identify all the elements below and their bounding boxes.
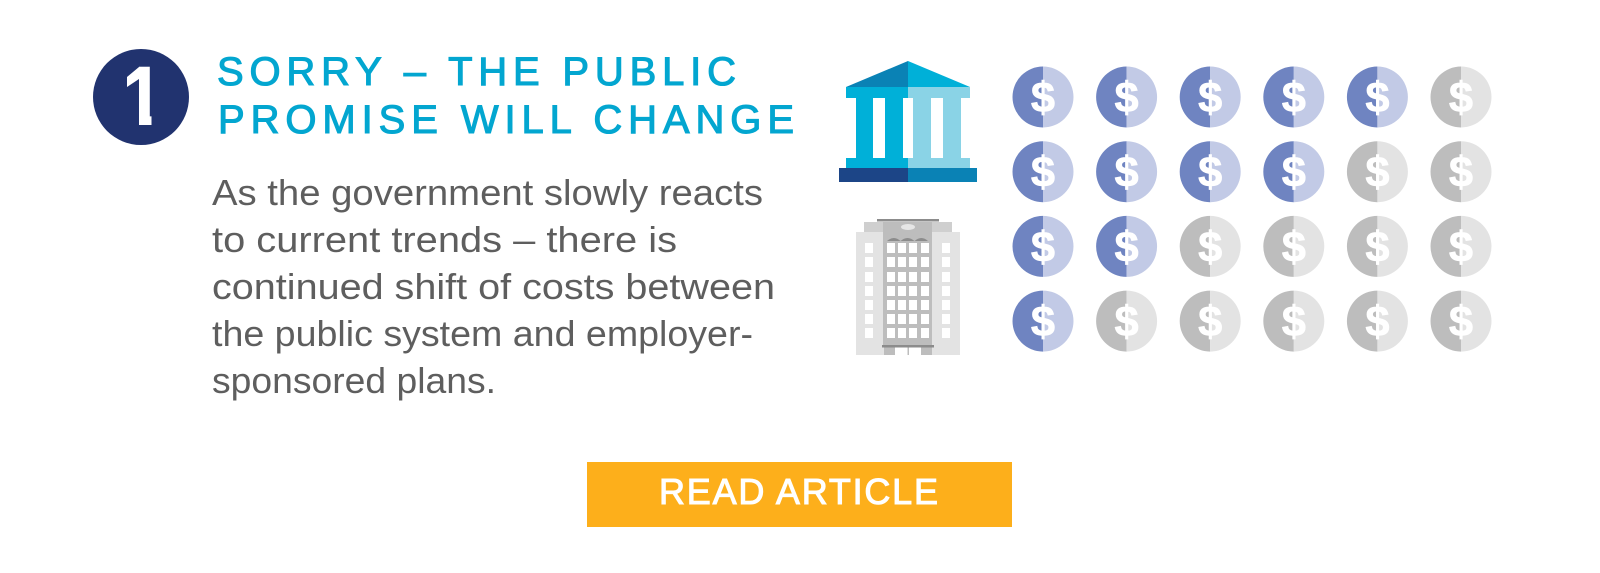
coin row 2: four blue, two grey: $ bbox=[1282, 149, 1306, 197]
coin row 3: two blue, four grey: $ bbox=[1115, 223, 1139, 271]
coin row 1: five blue, one grey: $ bbox=[1365, 74, 1389, 122]
coin row 4: one blue, five grey: $ bbox=[1198, 298, 1222, 346]
coin row 4: one blue, five grey: $ bbox=[1365, 298, 1389, 346]
coin row 2: four blue, two grey: $ bbox=[1365, 149, 1389, 197]
coin row 4: one blue, five grey: $ bbox=[1449, 298, 1473, 346]
coin row 3: two blue, four grey: $ bbox=[1198, 223, 1222, 271]
coin row 1: five blue, one grey: $ bbox=[1115, 74, 1139, 122]
coin row 3: two blue, four grey: $ bbox=[1282, 223, 1306, 271]
read article button: READ ARTICLE bbox=[659, 471, 938, 512]
coin row 4: one blue, five grey bbox=[1013, 291, 1491, 352]
coin row 1: five blue, one grey bbox=[1013, 66, 1491, 128]
coin row 1: five blue, one grey: $ bbox=[1449, 74, 1473, 122]
coin row 1: five blue, one grey: $ bbox=[1282, 74, 1306, 122]
coin row 3: two blue, four grey bbox=[1013, 216, 1491, 277]
body text bbox=[212, 172, 775, 401]
coin row 2: four blue, two grey: $ bbox=[1031, 149, 1055, 197]
coin row 2: four blue, two grey: $ bbox=[1449, 149, 1473, 197]
body text: As the government slowly reacts bbox=[212, 172, 763, 213]
coin row 2: four blue, two grey: $ bbox=[1115, 149, 1139, 197]
coin row 4: one blue, five grey: $ bbox=[1282, 298, 1306, 346]
body text: to current trends – there is bbox=[212, 219, 677, 260]
coin row 4: one blue, five grey: $ bbox=[1115, 298, 1139, 346]
infographic canvas bbox=[93, 49, 1492, 527]
coin row 3: two blue, four grey: $ bbox=[1365, 223, 1389, 271]
heading: SORRY – THE PUBLIC bbox=[217, 50, 736, 94]
dollar coin grid bbox=[1013, 66, 1491, 352]
coin row 4: one blue, five grey: $ bbox=[1031, 298, 1055, 346]
heading bbox=[217, 50, 794, 142]
coin row 3: two blue, four grey: $ bbox=[1449, 223, 1473, 271]
coin row 3: two blue, four grey: $ bbox=[1031, 223, 1055, 271]
number badge: 1 bbox=[119, 49, 165, 143]
coin row 1: five blue, one grey: $ bbox=[1198, 74, 1222, 122]
number badge bbox=[93, 49, 189, 145]
coin row 1: five blue, one grey: $ bbox=[1031, 74, 1055, 122]
coin row 2: four blue, two grey: $ bbox=[1198, 149, 1222, 197]
icon: office tower bbox=[856, 219, 960, 355]
coin row 2: four blue, two grey bbox=[1013, 141, 1491, 202]
read article button bbox=[587, 462, 1012, 527]
icon: government building bbox=[839, 61, 977, 182]
heading: PROMISE WILL CHANGE bbox=[218, 98, 794, 142]
body text: the public system and employer- bbox=[212, 313, 753, 354]
body text: sponsored plans. bbox=[212, 360, 496, 401]
body text: continued shift of costs between bbox=[212, 266, 775, 307]
